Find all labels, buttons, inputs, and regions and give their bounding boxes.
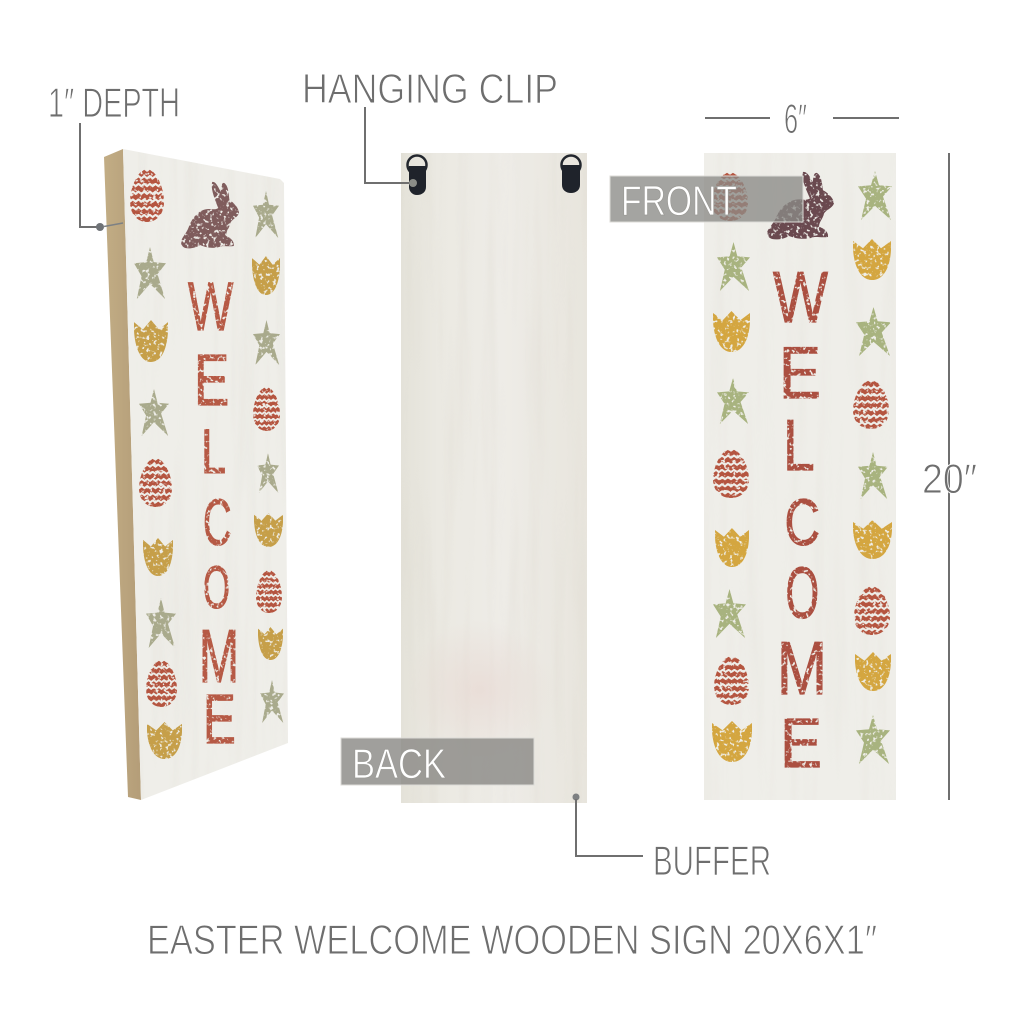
buffer text: BUFFER (653, 837, 771, 884)
icon: left hanging clip (408, 156, 426, 195)
label tag: BACK (341, 738, 534, 787)
WELCOME lettering, side view: W (188, 269, 233, 345)
label tag: FRONT: FRONT (621, 177, 737, 224)
label: buffer (572, 794, 771, 884)
WELCOME lettering, front view: W (773, 257, 828, 337)
WELCOME lettering, side view: O (203, 555, 230, 621)
back board (401, 153, 587, 803)
front board (704, 153, 896, 800)
painted icons, front view (712, 171, 892, 764)
panel: front view of sign (704, 153, 896, 800)
depth text: 1″ DEPTH (48, 79, 180, 126)
WELCOME lettering, side view (188, 269, 239, 758)
WELCOME lettering, front view: O (786, 553, 819, 634)
hanging clip marker (409, 179, 417, 187)
dimension: height 20 inch: 20″ (922, 455, 977, 502)
WELCOME lettering, side view: E (194, 341, 229, 421)
depth marker (96, 223, 104, 231)
dimension: width 6 inch: 6″ (784, 95, 807, 142)
label tag: BACK: BACK (352, 740, 446, 787)
label: hanging clip (302, 65, 558, 187)
WELCOME lettering, front view (773, 257, 828, 783)
WELCOME lettering, front view: M (777, 628, 827, 711)
WELCOME lettering, front view: E (780, 705, 822, 783)
WELCOME lettering, side view: M (199, 615, 239, 699)
WELCOME lettering, side view: C (203, 486, 232, 560)
title: EASTER WELCOME WOODEN SIGN 20X6X1″ (147, 916, 877, 963)
sign face, angled (123, 149, 288, 800)
buffer leader line (576, 799, 643, 856)
painted icons, side view (130, 172, 284, 759)
panel: back view of sign (401, 153, 587, 803)
buffer marker (572, 794, 580, 800)
panel: side view of sign (104, 149, 290, 801)
hanging clip leader line (365, 107, 410, 183)
hanging clip text: HANGING CLIP (302, 65, 558, 112)
icon: right hanging clip (562, 156, 580, 193)
wooden edge showing depth (104, 149, 141, 800)
WELCOME lettering, front view: E (779, 333, 821, 414)
label: 1 inch depth (48, 79, 180, 231)
depth leader line (80, 123, 100, 227)
WELCOME lettering, side view: E (203, 679, 236, 758)
pink wash near bottom (405, 620, 555, 760)
WELCOME lettering, side view: L (201, 415, 226, 487)
WELCOME lettering, front view: C (784, 486, 820, 560)
WELCOME lettering, front view: L (783, 405, 815, 486)
depth arrow (104, 223, 123, 226)
